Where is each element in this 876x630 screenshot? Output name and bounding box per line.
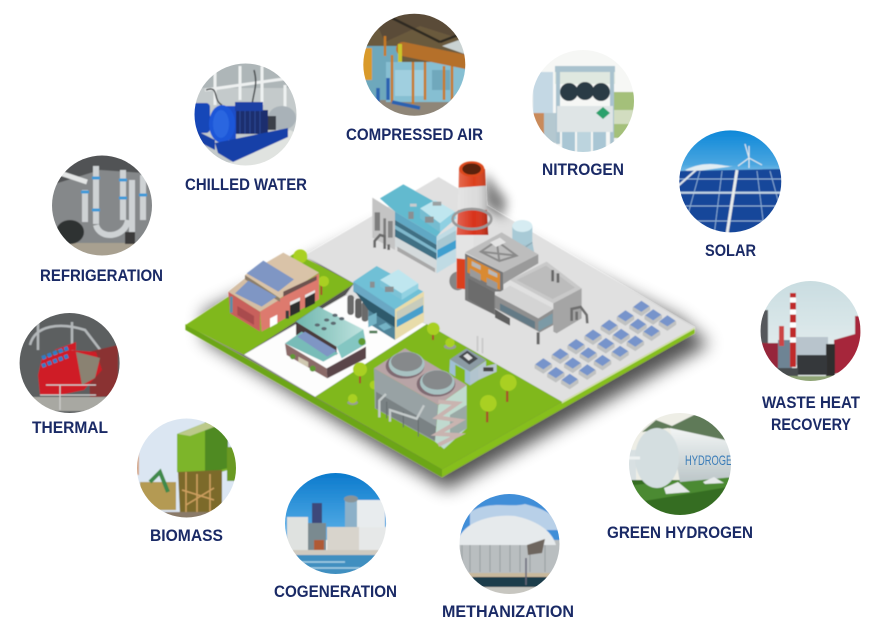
circle: nitrogen photo (530, 48, 636, 154)
circle: cogeneration photo (285, 473, 386, 574)
buildings lower lawn (347, 323, 517, 449)
label: nitrogen: NITROGEN (542, 161, 624, 179)
circle: biomass photo (137, 418, 236, 518)
trees right lawn (480, 374, 517, 422)
label: chilled water: CHILLED WATER (185, 176, 307, 194)
trees on lawn (347, 323, 456, 405)
circle: green hydrogen photo (629, 413, 731, 515)
cooling tower unit (374, 348, 467, 449)
label: solar: SOLAR (705, 242, 756, 260)
building: blue office middle (347, 266, 424, 340)
building: teal roof workshop (285, 307, 366, 378)
label: waste heat recovery (762, 394, 860, 434)
platform base (185, 177, 694, 477)
label: compressed air: COMPRESSED AIR (346, 126, 483, 144)
water tower (510, 220, 535, 257)
site platform (185, 177, 709, 490)
label: cogeneration: COGENERATION (274, 583, 397, 601)
solar panel array (535, 301, 676, 389)
label: biomass: BIOMASS (150, 527, 223, 545)
circle: refrigeration photo (52, 156, 152, 256)
label: thermal: THERMAL (32, 419, 108, 437)
chimney (449, 161, 491, 290)
small utility building (449, 336, 497, 385)
label: refrigeration: REFRIGERATION (40, 267, 163, 285)
building: blue office back (372, 184, 456, 273)
chimney shadow (484, 172, 507, 218)
label: green hydrogen: GREEN HYDROGEN (607, 524, 753, 542)
building: grey power plant (465, 232, 587, 344)
circle: solar photo (678, 128, 783, 236)
tank lettering: HYDROGEN (685, 452, 739, 468)
buildings left part of site (228, 249, 440, 378)
label: waste heat recovery: RECOVERY (771, 416, 851, 434)
label: waste heat recovery: WASTE HEAT (762, 394, 860, 412)
circle: chilled water photo (194, 64, 296, 166)
building: red warehouse (228, 253, 319, 332)
label: methanization: METHANIZATION (442, 603, 574, 621)
circle: methanization photo (460, 494, 560, 594)
circle: waste heat recovery photo (760, 281, 860, 381)
circle: compressed air photo (363, 14, 466, 116)
buildings upper part of site (372, 161, 587, 344)
circle: thermal photo (20, 313, 120, 413)
tree at white zone edge (427, 322, 440, 340)
central isometric industrial site (185, 161, 709, 490)
platform shadow (204, 201, 709, 490)
trees behind warehouse (293, 249, 329, 295)
